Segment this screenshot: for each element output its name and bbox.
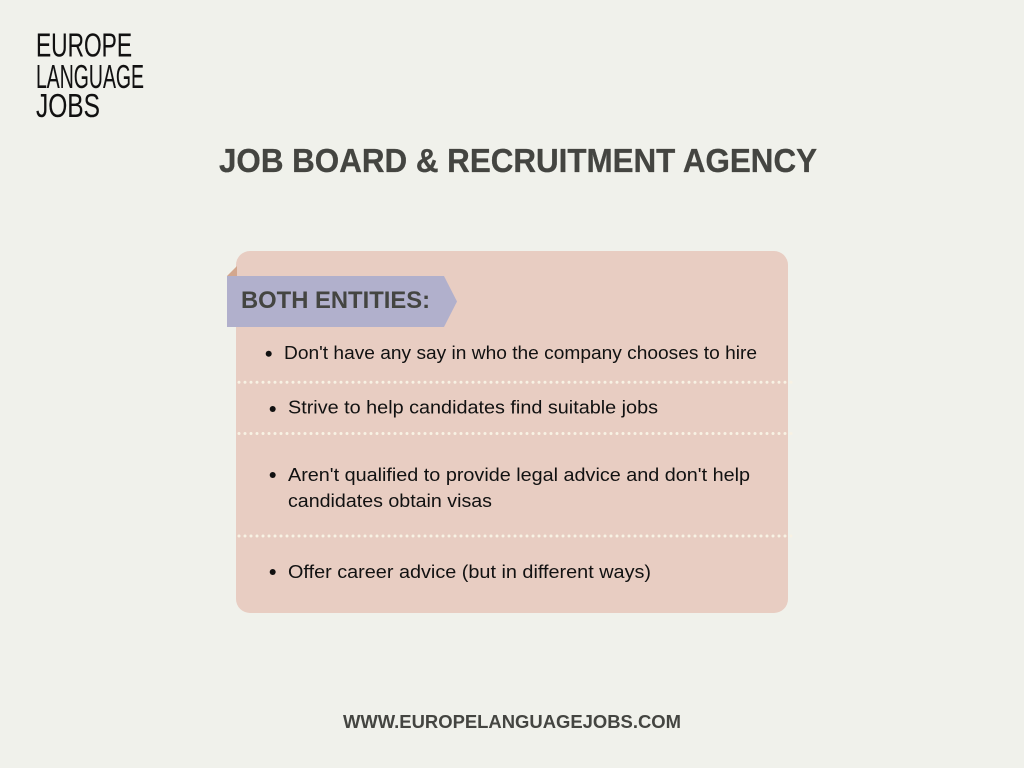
logo: Europe Language Jobs: LANGUAGE xyxy=(36,59,144,96)
list item 4: Offer career advice (but in different ways) xyxy=(288,562,651,582)
ribbon: both entities heading: BOTH ENTITIES: xyxy=(241,287,430,314)
list item 3: candidates obtain visas xyxy=(288,491,492,511)
panel background xyxy=(236,251,788,613)
ribbon fold xyxy=(227,266,237,276)
list item 2: Strive to help candidates find suitable jobs xyxy=(288,398,658,418)
logo: Europe Language Jobs: JOBS xyxy=(36,88,100,125)
logo: Europe Language Jobs: EUROPE xyxy=(36,28,132,64)
footer website: WWW.EUROPELANGUAGEJOBS.COM xyxy=(343,712,681,732)
panel: both entities xyxy=(227,251,797,613)
logo: Europe Language Jobs xyxy=(36,28,144,125)
ribbon: both entities heading xyxy=(227,276,457,327)
title: JOB BOARD & RECRUITMENT AGENCY xyxy=(219,142,817,179)
list item 1: Don't have any say in who the company chooses to hire xyxy=(284,343,757,363)
list item 3 xyxy=(270,465,750,511)
list item 3: Aren't qualified to provide legal advice and don't help xyxy=(288,465,750,485)
